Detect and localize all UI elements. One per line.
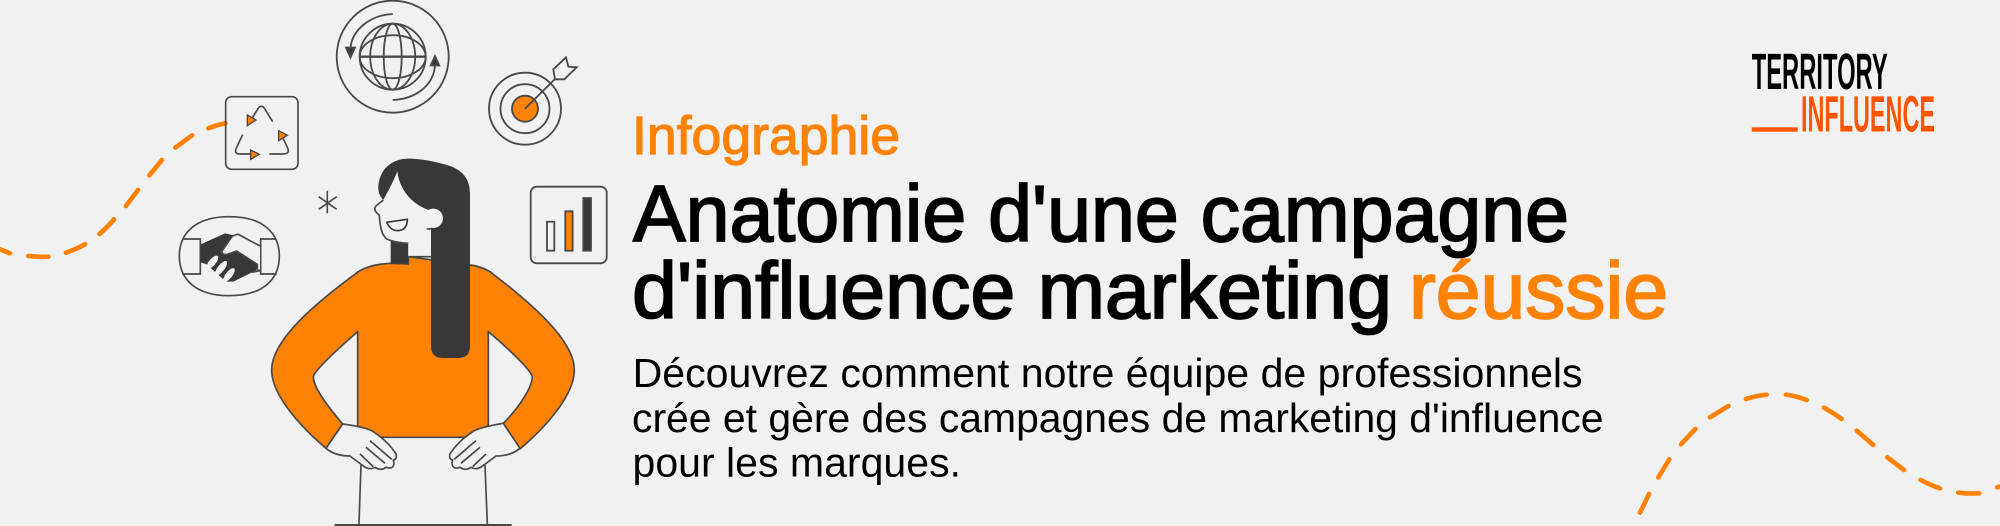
title: Anatomie d'une campagne [633, 169, 1569, 258]
sweater [272, 257, 574, 449]
icon: asterisk [319, 191, 337, 213]
icon: globe [337, 1, 449, 113]
description text: crée et gère des campagnes de marketing d'influence [632, 395, 1604, 441]
icon: recycle box [226, 97, 298, 169]
dashed curve left [0, 123, 225, 257]
icon: handshake [179, 217, 279, 296]
description text: pour les marques. [632, 440, 961, 486]
neck [391, 240, 408, 264]
hands and legs [326, 423, 520, 525]
logo: Territory Influence [1752, 43, 1935, 143]
title [632, 169, 1668, 335]
person illustration [272, 159, 574, 525]
icon: bar chart box [531, 187, 607, 263]
title: d'influence marketing [632, 246, 1392, 335]
icon: target [489, 57, 577, 145]
description text: Découvrez comment notre équipe de professionnels [633, 350, 1583, 396]
title: réussie [1409, 246, 1668, 335]
hair [378, 159, 470, 358]
dashed curve right [1640, 395, 2000, 513]
label: Infographie: Infographie [632, 106, 900, 166]
face [375, 172, 443, 243]
description text [632, 350, 1604, 486]
